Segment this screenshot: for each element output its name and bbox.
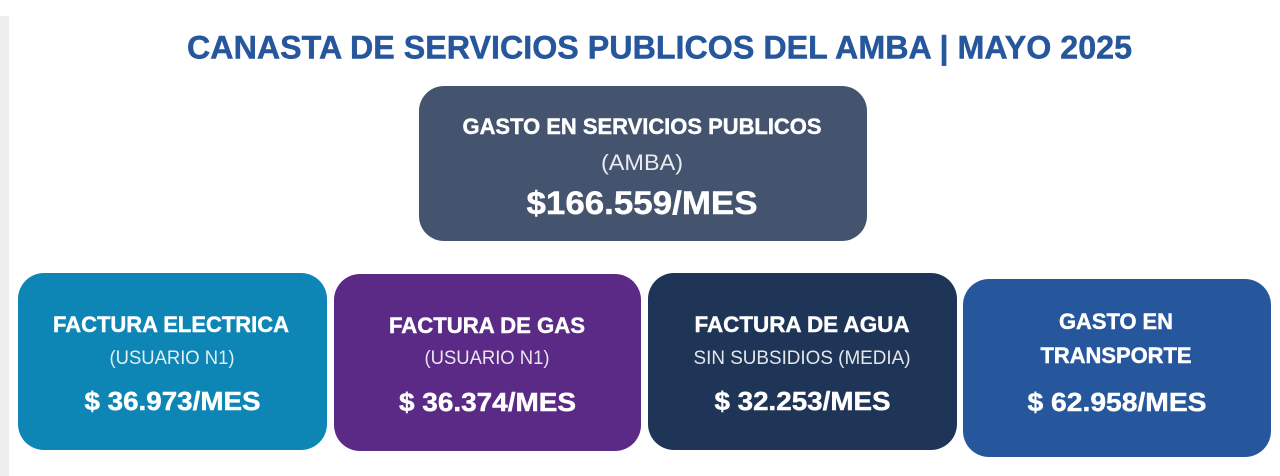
- value: gas: $ 36.374/MES: [399, 387, 576, 417]
- text: user level: (USUARIO N1): [424, 348, 550, 369]
- value: total: $166.559/MES: [526, 185, 758, 221]
- panel: water bill: [648, 273, 957, 450]
- value: electricity: $ 36.973/MES: [84, 386, 260, 416]
- text: user level: (USUARIO N1): [110, 348, 234, 369]
- heading: gas: FACTURA DE GAS: [389, 313, 585, 338]
- panel: electricity bill: [18, 273, 327, 450]
- panel: transport spending: [963, 279, 1271, 457]
- text: no subsidies: SIN SUBSIDIOS (MEDIA): [694, 348, 910, 369]
- heading: electricity: FACTURA ELECTRICA: [53, 312, 289, 337]
- text: region: (AMBA): [601, 150, 683, 175]
- heading: water: FACTURA DE AGUA: [694, 312, 910, 337]
- heading: total spending: GASTO EN SERVICIOS PUBLICOS: [462, 114, 822, 139]
- title: CANASTA DE SERVICIOS PUBLICOS DEL AMBA | MAYO 2025: [187, 30, 1132, 66]
- panel: gas bill: [334, 274, 641, 451]
- value: transport: $ 62.958/MES: [1028, 387, 1206, 417]
- heading: transport: TRANSPORTE: [1040, 343, 1192, 368]
- heading: transport: GASTO EN: [1059, 309, 1173, 334]
- heading: transport: [1040, 309, 1192, 368]
- value: water: $ 32.253/MES: [714, 386, 890, 416]
- panel: total spending: [419, 86, 867, 241]
